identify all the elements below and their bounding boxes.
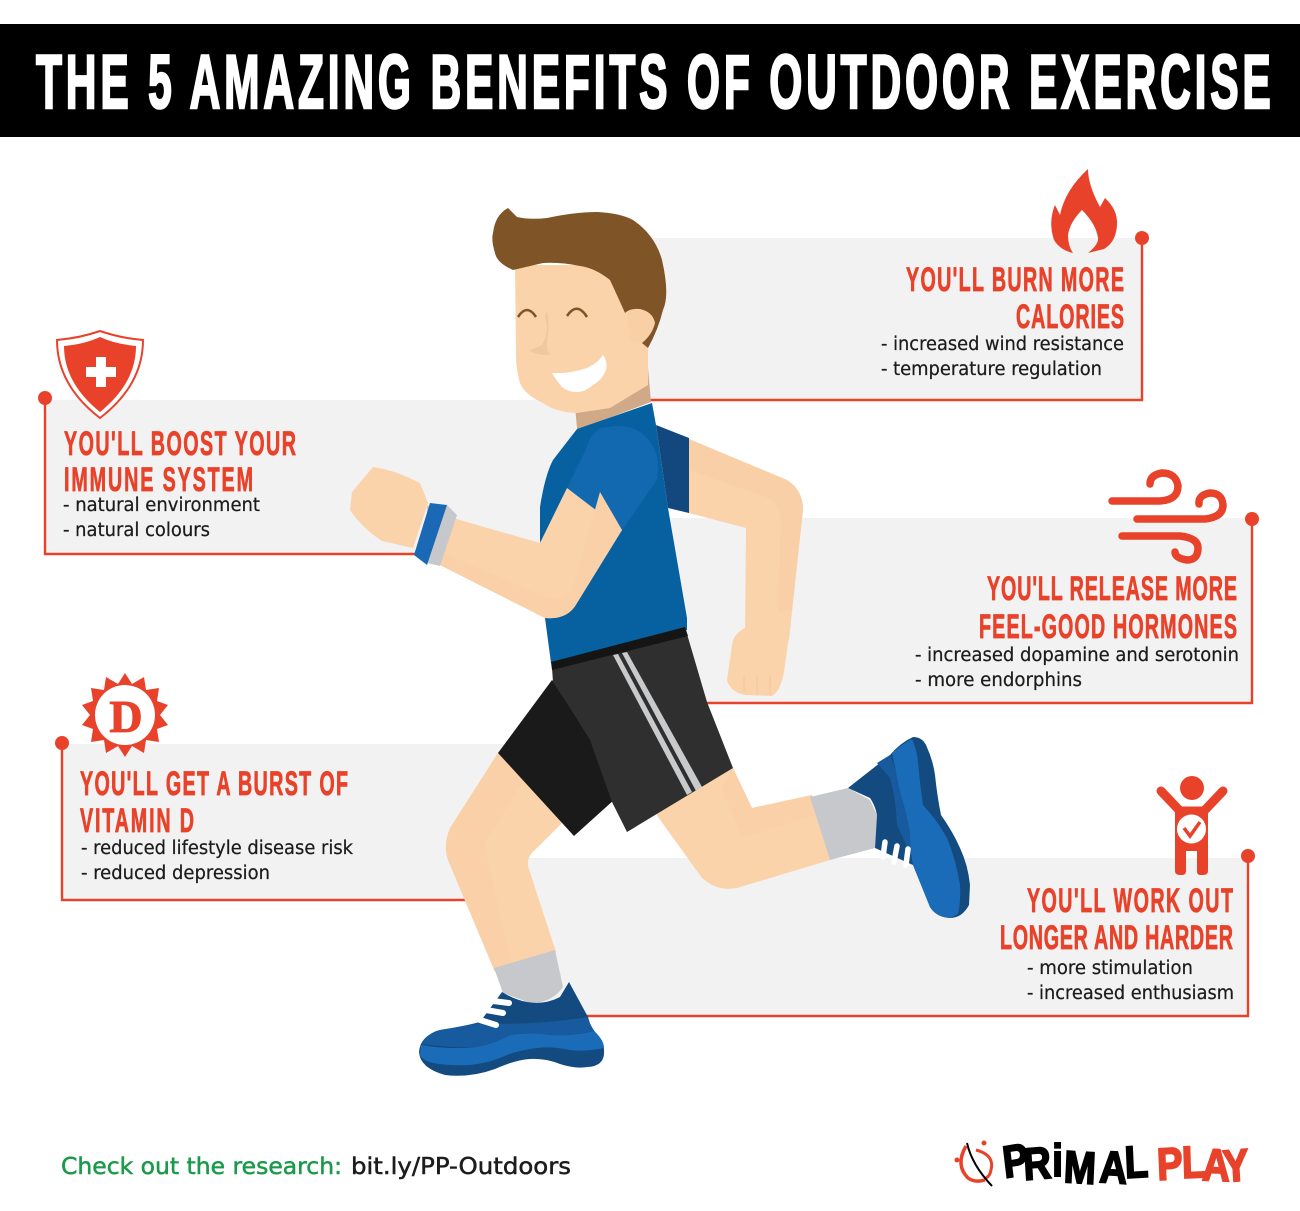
title: THE 5 AMAZING BENEFITS OF OUTDOOR EXERCISE (36, 40, 1271, 125)
text: burn more calories (881, 260, 1124, 380)
logo mark (954, 1140, 992, 1186)
icon: vitamin D sun: D (109, 691, 143, 742)
text: feel-good hormones: - increased dopamine and serotonin (915, 645, 1239, 666)
text: burst of vitamin D (80, 764, 353, 884)
text: burn more calories: YOU'LL BURN MORE (906, 260, 1124, 298)
footer: research link (61, 1154, 571, 1180)
eyes (518, 309, 587, 317)
neck (575, 368, 651, 430)
text: feel-good hormones: - more endorphins (915, 670, 1082, 691)
text: burst of vitamin D: - reduced depression (81, 863, 270, 884)
smile (552, 355, 607, 392)
text: work out longer and harder (1000, 881, 1234, 1004)
text: work out longer and harder: LONGER AND HARDER (1000, 918, 1233, 956)
icon: shield with cross (57, 331, 143, 418)
front hand (350, 467, 428, 548)
nose (530, 310, 550, 355)
panel background: immune system (38, 391, 576, 554)
hair (492, 208, 666, 348)
panel background: work out longer (525, 849, 1255, 1016)
text: burst of vitamin D: - reduced lifestyle disease risk (81, 838, 353, 859)
head (492, 208, 666, 413)
text: boost immune system: YOU'LL BOOST YOUR (64, 424, 296, 462)
back lower leg and sock (650, 762, 877, 889)
front arm (440, 488, 622, 618)
text: work out longer and harder: YOU'LL WORK OUT (1027, 881, 1233, 919)
footer: research link: Check out the research: (61, 1154, 342, 1180)
text: burn more calories: - temperature regulation (881, 359, 1102, 380)
blue shirt (540, 403, 689, 670)
icon: vitamin D sun (82, 673, 168, 757)
wristband (414, 503, 457, 566)
text: feel-good hormones: YOU'LL RELEASE MORE (987, 569, 1237, 607)
text: boost immune system (63, 424, 296, 541)
icon: flame (1051, 169, 1117, 253)
text: work out longer and harder: - more stimulation (1027, 958, 1193, 979)
runner figure (350, 208, 970, 1076)
back arm (689, 439, 803, 696)
text: burn more calories: CALORIES (1016, 297, 1124, 335)
text: boost immune system: IMMUNE SYSTEM (64, 460, 253, 498)
shorts (498, 634, 733, 836)
front shoe (419, 982, 604, 1076)
front leg and sock (446, 753, 575, 1003)
icon: wind (1112, 473, 1223, 560)
logo: Primal Play: PRiMAL (1000, 1133, 1149, 1194)
panel background: burn calories (640, 231, 1149, 400)
text: feel-good hormones (915, 569, 1239, 691)
panel background: feel-good hormones (668, 512, 1259, 704)
logo: Primal Play (954, 1133, 1250, 1194)
footer: research link: bit.ly/PP-Outdoors (351, 1154, 571, 1180)
back shoe (848, 737, 970, 918)
text: work out longer and harder: - increased enthusiasm (1027, 983, 1234, 1004)
text: feel-good hormones: FEEL-GOOD HORMONES (979, 607, 1237, 645)
icon: person with check (1161, 776, 1223, 875)
text: burst of vitamin D: VITAMIN D (80, 801, 194, 839)
text: boost immune system: - natural environment (63, 495, 260, 516)
ear (627, 308, 655, 343)
text: burst of vitamin D: YOU'LL GET A BURST OF (80, 764, 348, 802)
panel background: vitamin D (55, 736, 513, 900)
text: burn more calories: - increased wind resistance (881, 334, 1124, 355)
text: boost immune system: - natural colours (63, 520, 210, 541)
logo: Primal Play: PLAY (1156, 1136, 1250, 1192)
